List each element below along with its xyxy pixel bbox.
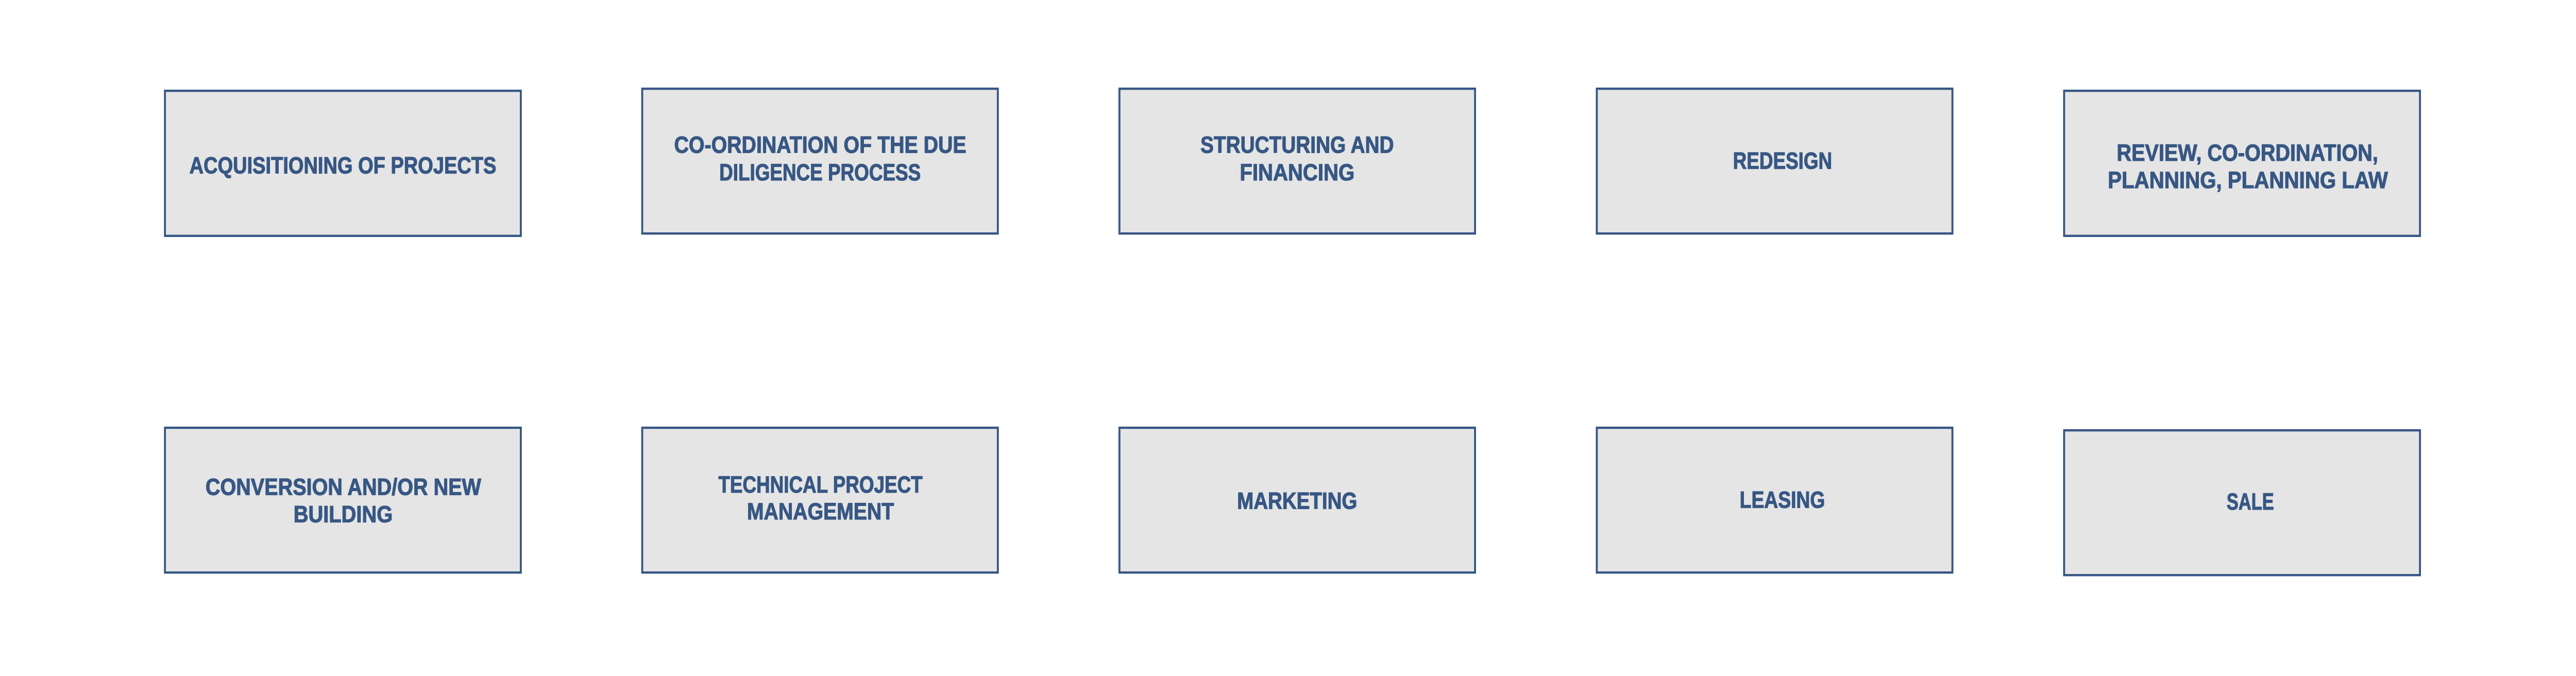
panel: co-ordination of due diligence — [642, 89, 998, 233]
panel: redesign — [1597, 89, 1953, 233]
panel: marketing — [1120, 428, 1475, 572]
label: review, co-ordination, planning, planning law: PLANNING, PLANNING LAW — [2108, 167, 2388, 193]
label: technical project management: MANAGEMENT — [747, 498, 894, 525]
label: review, co-ordination, planning, planning law — [2108, 140, 2388, 193]
label: sale: SALE — [2227, 488, 2274, 515]
panel: conversion and/or new building — [165, 428, 521, 572]
panel: acquisitioning of projects — [165, 91, 521, 236]
label: marketing: MARKETING — [1237, 488, 1357, 514]
panel: structuring and financing — [1120, 89, 1475, 233]
label: conversion and/or new building: CONVERSION AND/OR NEW — [206, 474, 481, 500]
label: conversion and/or new building: BUILDING — [294, 501, 393, 527]
panel: review, co-ordination, planning — [2064, 91, 2420, 236]
label: co-ordination of the due diligence process: CO-ORDINATION OF THE DUE — [674, 132, 967, 158]
label: co-ordination of the due diligence process: DILIGENCE PROCESS — [719, 159, 921, 185]
panel: leasing — [1597, 428, 1953, 572]
panel: technical project management — [642, 428, 998, 572]
label: review, co-ordination, planning, planning law: REVIEW, CO-ORDINATION, — [2117, 140, 2378, 166]
label: technical project management — [718, 471, 923, 525]
label: conversion and/or new building — [206, 474, 481, 527]
label: structuring and financing: FINANCING — [1240, 159, 1354, 185]
label: technical project management: TECHNICAL PROJECT — [718, 471, 923, 498]
label: structuring and financing: STRUCTURING AND — [1200, 132, 1394, 158]
label: co-ordination of the due diligence process — [674, 132, 967, 185]
label: redesign: REDESIGN — [1733, 148, 1832, 174]
label: acquisitioning of projects: ACQUISITIONING OF PROJECTS — [190, 153, 496, 178]
panel: sale — [2064, 430, 2420, 575]
label: leasing: LEASING — [1740, 487, 1825, 513]
label: structuring and financing — [1200, 132, 1394, 185]
